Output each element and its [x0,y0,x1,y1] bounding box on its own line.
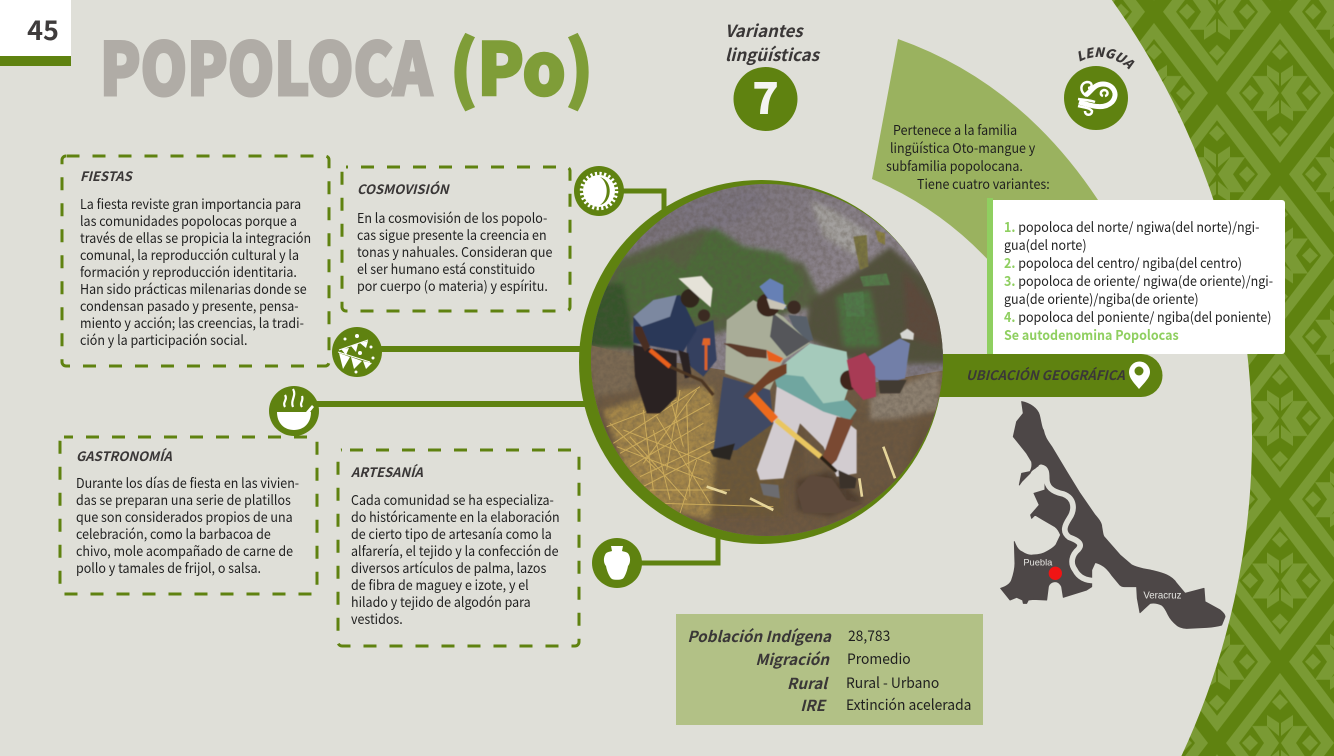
panel: cosmovision: tonas y nahuales. Consideran que [357,241,552,261]
panel: artesania: hilado y tejido de algodón para [351,591,531,611]
panel: gastronomia [58,436,318,596]
panel: gastronomia: das se preparan una serie de platillos [76,489,291,509]
icon: number of variants circle [734,63,798,131]
panel: artesania [336,448,580,648]
title: (Po) [450,11,593,116]
panel: artesania: ARTESANÍA [351,462,423,481]
panel: fiestas [60,154,330,368]
variants heading: Variantes [725,18,803,42]
page number tab [0,0,71,66]
curved label: lengua: LENGUA [1078,47,1135,70]
panel: cosmovision: En la cosmovisión de los popolo- [357,207,547,227]
variants list panel: 1. popoloca del norte/ ngiwa(del norte)/ngi- [1004,216,1259,236]
variants heading: lingüísticas [725,42,819,66]
statistics table text: IRE [800,694,825,716]
statistics table text [687,625,971,716]
dirt clod [798,476,854,513]
icon: clay jar [592,538,642,588]
photo grain [583,180,950,543]
photo ring [579,180,943,544]
language family text: Pertenece a la familia [893,119,1017,139]
panel: artesania: de cierto tipo de artesanía como la [351,523,552,543]
panel: artesania: Cada comunidad se ha especializa- [351,489,554,509]
map: Puebla and Veracruz: Veracruz [1143,590,1182,601]
icon: location pin [1129,362,1150,389]
panel: cosmovision: el ser humano está constituido [357,258,535,278]
panel: fiestas: miento y acción; las creencias, la tradi- [80,312,304,332]
person 1 [633,276,713,413]
panel: artesania: de fibra de maguey e izote, y el [351,574,529,594]
language family wedge [872,39,1098,262]
person far left background [687,301,813,377]
icon: festive banners [332,327,382,377]
title: POPOLOCA [100,11,433,116]
icon: steaming bowl [269,386,319,436]
language family text [886,119,1050,193]
language family text: lingüística Oto-mangue y [890,137,1035,157]
connector: fiestas [375,346,585,352]
geographic location label: UBICACIÓN GEOGRÁFICA [966,365,1125,384]
panel: fiestas: comunal, la reproducción cultural y la [80,244,299,264]
icon: sun and moon [574,166,624,216]
connector: artesania [638,536,718,563]
panel: cosmovision: por cuerpo (o materia) y espíritu. [357,275,548,295]
map: Puebla and Veracruz [1001,402,1225,628]
geographic location bar [930,354,1162,397]
panel: fiestas: La fiesta reviste gran importancia para [80,193,301,213]
photo: farmers working the soil [583,180,950,543]
statistics table text: 28,783 [848,625,890,646]
variants list panel: gua(de oriente)/ngiba(de oriente) [1004,288,1199,308]
panel: artesania: vestidos. [351,608,403,628]
language family text: subfamilia popolocana. [886,155,1023,175]
panel: artesania: alfarería, el tejido y la confección de [351,540,559,560]
panel: gastronomia: que son considerados propios de una [76,506,293,526]
panel: artesania: do históricamente en la elaboración [351,506,560,526]
panel: fiestas: ción y la participación social. [80,329,247,349]
panel: fiestas: formación y reproducción identitaria. [80,261,297,281]
statistics table text: Rural - Urbano [846,672,939,693]
panel: gastronomia: pollo y tamales de frijol, o salsa. [76,557,261,577]
table background: statistics [676,614,983,725]
variants list panel: 3. popoloca de oriente/ ngiwa(de oriente)/ngi- [1004,270,1273,290]
statistics table text: Rural [787,672,827,694]
panel: gastronomia: GASTRONOMÍA [76,446,172,465]
page number: 45 [27,9,59,48]
panel: fiestas: través de ellas se propicia la integración [80,227,311,247]
straw [607,387,773,513]
curved label: lengua [1078,47,1135,70]
panel: cosmovision [340,166,572,312]
panel: fiestas: Han sido prácticas milenarias donde se [80,278,307,298]
statistics table text: Extinción acelerada [846,694,971,715]
panel: fiestas: las comunidades popolocas porque a [80,210,297,230]
person 3 [743,343,876,498]
variants list panel: 4. popoloca del poniente/ ngiba(del poniente) [1004,306,1271,326]
variants list panel: Se autodenomina Popolocas [1004,324,1179,344]
person 2 [710,278,810,460]
map: Puebla and Veracruz: Puebla [1023,557,1053,567]
icon: lengua circle [1064,66,1128,130]
panel: artesania: diversos artículos de palma, lazos [351,557,546,577]
variants heading [725,18,820,66]
statistics table text: Migración [755,648,829,670]
connector: cosmovision [620,191,664,214]
woven green pattern background [1112,0,1334,756]
variants list panel: 2. popoloca del centro/ ngiba(del centro) [1004,252,1242,272]
person 4 [868,329,914,393]
statistics table text: Promedio [847,648,911,669]
panel: gastronomia: celebración, como la barbacoa de [76,523,271,543]
panel: gastronomia: chivo, mole acompañado de carne de [76,540,293,560]
icon: number of variants circle: 7 [752,63,779,127]
panel: cosmovision: cas sigue presente la creencia en [357,224,547,244]
statistics table text: Población Indígena [687,625,831,647]
variants list panel [987,198,1285,354]
language family text: Tiene cuatro variantes: [917,173,1050,193]
panel: fiestas: FIESTAS [80,166,132,185]
panel: gastronomia: Durante los días de fiesta en las vivien- [76,472,299,492]
panel: fiestas: condensan pasado y presente, pensa- [80,295,299,315]
soil [583,343,947,543]
variants list panel: gua(del norte) [1004,234,1087,254]
panel: cosmovision: COSMOVISIÓN [357,179,449,198]
connector: gastronomia [315,401,590,407]
